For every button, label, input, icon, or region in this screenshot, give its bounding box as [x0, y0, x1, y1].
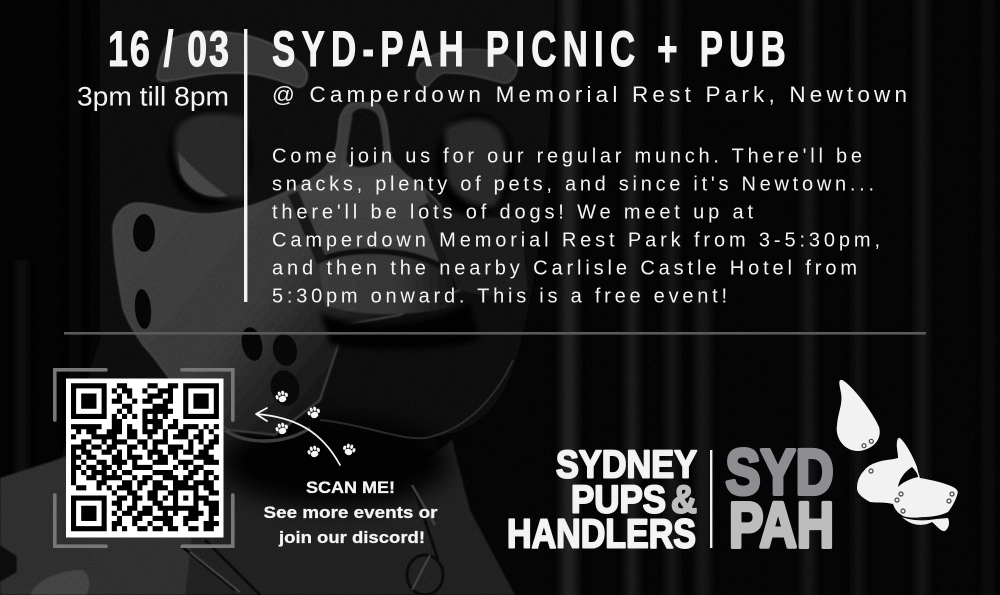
logo SYD PAH: PAH: [729, 489, 834, 561]
logo wordmark: &: [671, 478, 697, 522]
logo wordmark: HANDLERS: [507, 510, 696, 556]
event description: snacks, plenty of pets, and since it's Newtown...: [272, 174, 874, 196]
icon: pup hood: [837, 380, 958, 531]
event description: and then the nearby Carlisle Castle Hotel from: [272, 258, 857, 280]
location: @ Camperdown Memorial Rest Park, Newtown: [272, 82, 907, 107]
scan me caption: join our discord!: [278, 528, 425, 547]
logo wordmark: [507, 444, 697, 556]
vertical divider: [244, 29, 247, 302]
logo divider: [710, 450, 712, 548]
QR code: [55, 370, 233, 546]
event title: SYD-PAH PICNIC + PUB: [272, 22, 786, 78]
logo SYD PAH: [726, 436, 834, 561]
date: 16 / 03: [108, 22, 229, 77]
event description: [272, 146, 880, 308]
logo SYD PAH: SYD: [726, 436, 834, 508]
arrow to QR code: [256, 408, 340, 465]
event description: 5:30pm onward. This is a free event!: [272, 286, 727, 308]
scan me caption: [264, 478, 438, 547]
icon: paw prints: [274, 390, 357, 459]
event description: Camperdown Memorial Rest Park from 3-5:30pm,: [272, 230, 880, 252]
logo wordmark: SYDNEY: [556, 444, 697, 486]
time: 3pm till 8pm: [77, 82, 229, 112]
event description: Come join us for our regular munch. There'll be: [272, 146, 862, 168]
logo wordmark: PUPS: [571, 478, 666, 522]
event description: there'll be lots of dogs! We meet up at: [272, 202, 753, 224]
scan me caption: See more events or: [264, 503, 438, 522]
scan me caption: SCAN ME!: [306, 478, 395, 497]
horizontal divider: [64, 332, 926, 335]
